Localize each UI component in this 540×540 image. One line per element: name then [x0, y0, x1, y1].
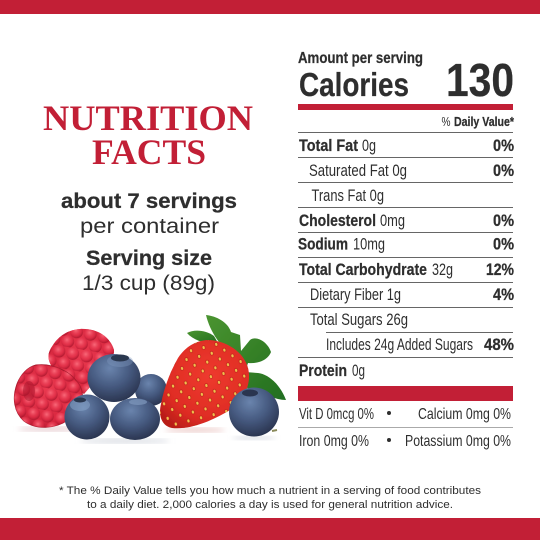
blueberry: right	[229, 388, 279, 436]
vitamins row 2	[299, 433, 511, 450]
servings text	[61, 190, 237, 238]
vitamins row 2: Potassium 0mg 0%	[405, 433, 511, 450]
strawberry	[160, 340, 249, 428]
footnote	[59, 485, 482, 511]
calories value: 130	[446, 54, 514, 106]
blueberry: bottom left	[64, 394, 110, 440]
row: dietary fiber	[310, 285, 514, 304]
footnote: * The % Daily Value tells you how much a nutrient in a serving of food contributes	[59, 485, 482, 497]
row: sodium: 0%	[493, 234, 514, 254]
vitamins row 1	[299, 406, 511, 423]
serving size text: 1/3 cup (89g)	[82, 272, 215, 295]
vitamins row 1: Vit D 0mcg 0%	[299, 406, 374, 423]
row: sodium	[298, 234, 514, 254]
serving size text: Serving size	[86, 247, 212, 270]
strawberry leaves	[187, 315, 286, 400]
row: sodium: Sodium	[298, 234, 348, 254]
row: total fat: Total Fat	[299, 136, 358, 155]
vitamins row 1: Calcium 0mg 0%	[418, 406, 511, 423]
amount per serving label: Amount per serving	[298, 50, 423, 67]
row: total fat: 0g	[362, 136, 376, 155]
row: added sugars: 48%	[484, 335, 514, 354]
row: trans fat: Trans Fat 0g	[312, 186, 384, 205]
nutrition panel	[298, 50, 515, 450]
red divider	[298, 104, 513, 110]
illustration: berries	[14, 315, 286, 444]
row: cholesterol: 0%	[493, 211, 514, 230]
row: cholesterol	[299, 211, 514, 230]
row: total carbohydrate: 12%	[486, 260, 514, 279]
daily value header: %	[442, 114, 451, 129]
daily value header: Daily Value*	[454, 114, 515, 129]
row: total fat	[299, 136, 514, 155]
row: saturated fat	[309, 161, 514, 180]
row: dietary fiber: Dietary Fiber 1g	[310, 285, 401, 304]
row: total sugars: Total Sugars 26g	[310, 310, 408, 329]
raspberry: front	[14, 365, 82, 427]
row: total carbohydrate: Total Carbohydrate	[299, 260, 427, 279]
calories label: Calories	[299, 66, 409, 103]
row: protein: 0g	[352, 361, 365, 380]
row: sodium: 10mg	[353, 234, 385, 254]
blueberry: bottom centre	[110, 398, 160, 440]
footnote: to a daily diet. 2,000 calories a day is used for general nutrition advice.	[87, 499, 453, 511]
heading: nutrition facts: NUTRITION	[43, 98, 253, 138]
heading: nutrition facts: FACTS	[92, 132, 206, 172]
blueberry: back right	[135, 374, 167, 406]
row: added sugars: Includes 24g Added Sugars	[326, 335, 473, 354]
servings text: per container	[80, 215, 219, 238]
heading: nutrition facts	[43, 98, 253, 172]
vitamins row 2: Iron 0mg 0%	[299, 433, 369, 450]
row: cholesterol: Cholesterol	[299, 211, 376, 230]
row: saturated fat: Saturated Fat 0g	[309, 161, 407, 180]
row: saturated fat: 0%	[493, 161, 514, 180]
row: total fat: 0%	[493, 136, 514, 155]
bottom red band	[0, 518, 540, 540]
blueberry: top centre	[88, 354, 140, 402]
top red band	[0, 0, 540, 14]
row: cholesterol: 0mg	[380, 211, 405, 230]
row: dietary fiber: 4%	[493, 285, 514, 304]
raspberry: back	[48, 329, 114, 394]
serving size text	[82, 247, 215, 295]
red band	[298, 386, 513, 401]
row: total carbohydrate: 32g	[432, 260, 453, 279]
servings text: about 7 servings	[61, 190, 237, 213]
row: protein: Protein	[299, 361, 347, 380]
